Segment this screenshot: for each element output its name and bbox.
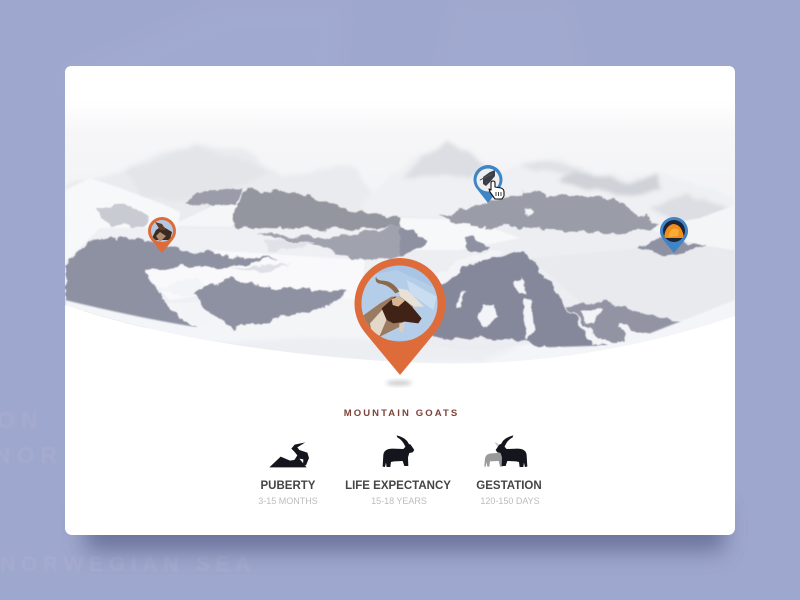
stat: puberty <box>258 442 318 506</box>
icon: hand cursor <box>489 181 504 199</box>
stat: gestation: 120-150 DAYS <box>480 496 540 506</box>
dark rock faces <box>65 189 707 352</box>
right upper ridge <box>440 192 660 233</box>
stat: gestation <box>476 435 542 506</box>
background label: partial place names <box>0 407 63 468</box>
goat neck and body <box>364 296 414 336</box>
background label: Norwegian Sea: NORWEGIAN SEA <box>0 553 255 576</box>
far mountains <box>68 140 727 226</box>
pin: blue climber <box>474 165 503 203</box>
background map texture <box>60 0 590 100</box>
distant rock patches <box>95 205 150 228</box>
goat head <box>382 297 422 323</box>
pin: main orange pin with goat <box>354 258 446 375</box>
panel: mountain landscape <box>65 66 735 380</box>
photo backdrop <box>360 270 440 340</box>
goat horn <box>376 277 399 293</box>
foreground snow slope <box>65 300 734 352</box>
pin: blue shell <box>660 217 688 253</box>
pin: orange small goat <box>148 217 176 253</box>
stat: puberty: 3-15 MONTHS <box>258 496 318 506</box>
pin: main orange pin shadow <box>386 381 412 385</box>
snow patches on rock <box>155 205 655 347</box>
card shadow <box>85 505 725 551</box>
stat: life expectancy: LIFE EXPECTANCY <box>345 480 451 492</box>
heading: Mountain Goats: MOUNTAIN GOATS <box>344 408 459 419</box>
central peak <box>433 250 610 352</box>
stat: life expectancy: 15-18 YEARS <box>371 496 427 506</box>
right lower rock <box>567 300 697 343</box>
left massif <box>65 238 278 328</box>
stat: puberty: PUBERTY <box>261 480 316 492</box>
stat: life expectancy <box>345 435 451 506</box>
snowfields <box>66 180 735 344</box>
card <box>65 66 735 535</box>
stat: gestation: GESTATION <box>476 480 542 492</box>
icon: goat <box>383 435 414 467</box>
icon: two goats <box>484 435 527 467</box>
icon: goat on rock <box>269 442 309 467</box>
